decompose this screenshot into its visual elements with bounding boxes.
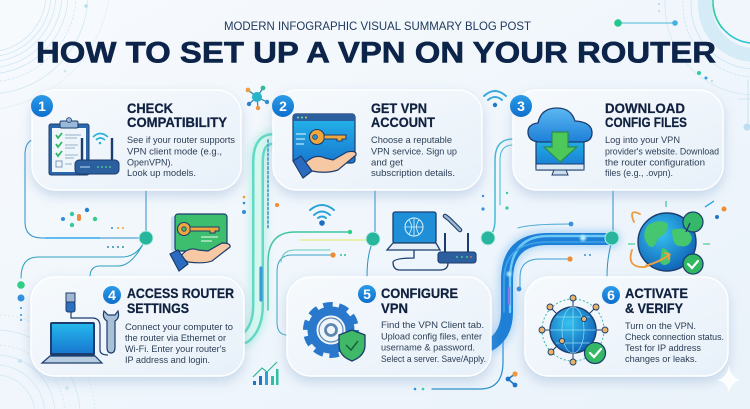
text block 3: files (e.g., .ovpn). xyxy=(605,167,673,178)
icon: key card and hand xyxy=(170,214,230,271)
icon: network hub xyxy=(246,86,269,110)
text block 5 xyxy=(381,319,486,364)
panel: step 6 activate and verify xyxy=(525,277,728,376)
title: HOW TO SET UP A VPN ON YOUR ROUTER xyxy=(36,36,716,70)
badge 2: 2 xyxy=(279,98,287,114)
decoration: bottom-left arcs xyxy=(0,315,95,408)
text block 5: Find the VPN Client tab. xyxy=(381,319,484,330)
text block 5: Select a server. Save/Apply. xyxy=(381,353,486,364)
subtitle: MODERN INFOGRAPHIC VISUAL SUMMARY BLOG POST xyxy=(224,19,532,33)
text block 6: Turn on the VPN. xyxy=(625,320,696,331)
badge 3 xyxy=(510,95,532,117)
text block 1: VPN client mode (e.g., xyxy=(127,146,222,156)
heading 4: SETTINGS xyxy=(127,300,189,316)
heading 6 xyxy=(625,285,688,316)
icon: connected globe xyxy=(539,295,608,365)
panel: step 3 download config files xyxy=(510,90,723,190)
icon: share xyxy=(506,371,518,387)
heading 3 xyxy=(605,100,687,130)
text block 1: OpenVPN). xyxy=(127,156,173,168)
icon: browser key and hand xyxy=(293,114,356,178)
icon: globe top right xyxy=(628,201,726,274)
text block 3: Log into your VPN xyxy=(605,134,680,145)
icon: gear and shield xyxy=(307,306,365,361)
connector: central green pipe xyxy=(245,139,370,338)
text block 4: the router via Ethernet or xyxy=(125,332,226,343)
icon: bar chart xyxy=(253,362,278,385)
badge 6 xyxy=(602,286,620,304)
badge 4 xyxy=(103,286,121,304)
heading 2 xyxy=(371,100,435,130)
connector: blue pipe xyxy=(490,235,612,345)
icon: cloud download monitor xyxy=(528,108,592,175)
text block 4: IP address and login. xyxy=(125,354,210,365)
heading 4: ACCESS ROUTER xyxy=(127,285,234,301)
icon: clipboard and router xyxy=(49,118,119,175)
heading 3: DOWNLOAD xyxy=(605,100,685,116)
icon: laptop usb and wrench xyxy=(42,293,119,363)
text block 6 xyxy=(625,320,724,364)
badge 2 xyxy=(272,95,294,117)
badge 6: 6 xyxy=(607,287,615,303)
panel: step 4 access router settings xyxy=(31,277,244,376)
text block 3 xyxy=(605,134,719,178)
text block 3: the router configuration xyxy=(605,156,705,168)
text block 6: changes or leaks. xyxy=(625,353,697,364)
text block 4 xyxy=(125,321,233,365)
text block 1: Look up models. xyxy=(127,167,196,178)
icon: green line accent top right xyxy=(614,19,678,27)
text block 5: Upload config files, enter xyxy=(381,330,482,342)
badge 1 xyxy=(31,95,53,117)
heading 2: GET VPN xyxy=(371,100,427,116)
panel: step 1 check compatibility xyxy=(31,90,241,190)
connectors: thin network lines xyxy=(21,139,613,389)
badge 3: 3 xyxy=(517,98,525,114)
icon: wifi top xyxy=(484,91,506,107)
text block 3: provider's website. Download xyxy=(605,146,719,156)
text block 4: Wi-Fi. Enter your router's xyxy=(125,343,226,354)
heading 6: ACTIVATE xyxy=(625,285,688,301)
badge 5 xyxy=(358,285,376,303)
icon: sparkle xyxy=(717,365,741,393)
text block 2: and get xyxy=(371,156,403,168)
decoration: top-left arcs xyxy=(0,0,110,110)
text block 6: Check connection status. xyxy=(625,331,724,342)
text block 2: subscription details. xyxy=(371,167,455,178)
text block 1: See if your router supports xyxy=(127,134,235,145)
panel: step 5 configure vpn xyxy=(287,277,491,376)
connector nodes and small dots xyxy=(17,192,619,390)
text block 6: Test for IP address xyxy=(625,342,701,353)
text block 4: Connect your computer to xyxy=(125,321,233,332)
icon: laptop with router and wrench xyxy=(387,212,476,270)
heading 5: VPN xyxy=(381,300,408,316)
badge 4: 4 xyxy=(108,287,116,303)
decoration: top-right arcs xyxy=(665,0,750,130)
connector: glow on left loop xyxy=(25,195,110,238)
text block 2: VPN service. Sign up xyxy=(371,146,457,156)
text block 1 xyxy=(127,134,235,178)
heading 1 xyxy=(127,100,228,130)
heading 5 xyxy=(381,285,458,316)
heading 3: CONFIG FILES xyxy=(605,114,687,130)
text block 5: username & password. xyxy=(381,342,475,352)
heading 4 xyxy=(127,285,234,316)
heading 6: & VERIFY xyxy=(625,300,684,316)
text block 2 xyxy=(371,134,457,178)
heading 1: COMPATIBILITY xyxy=(127,114,228,130)
badge 1: 1 xyxy=(38,98,46,114)
text block 2: Choose a reputable xyxy=(371,134,452,145)
badge 5: 5 xyxy=(363,286,371,302)
heading 2: ACCOUNT xyxy=(371,114,435,130)
panel: step 2 get vpn account xyxy=(272,90,482,190)
icon: wifi middle xyxy=(310,205,334,226)
heading 1: CHECK xyxy=(127,100,173,116)
heading 5: CONFIGURE xyxy=(381,285,458,301)
